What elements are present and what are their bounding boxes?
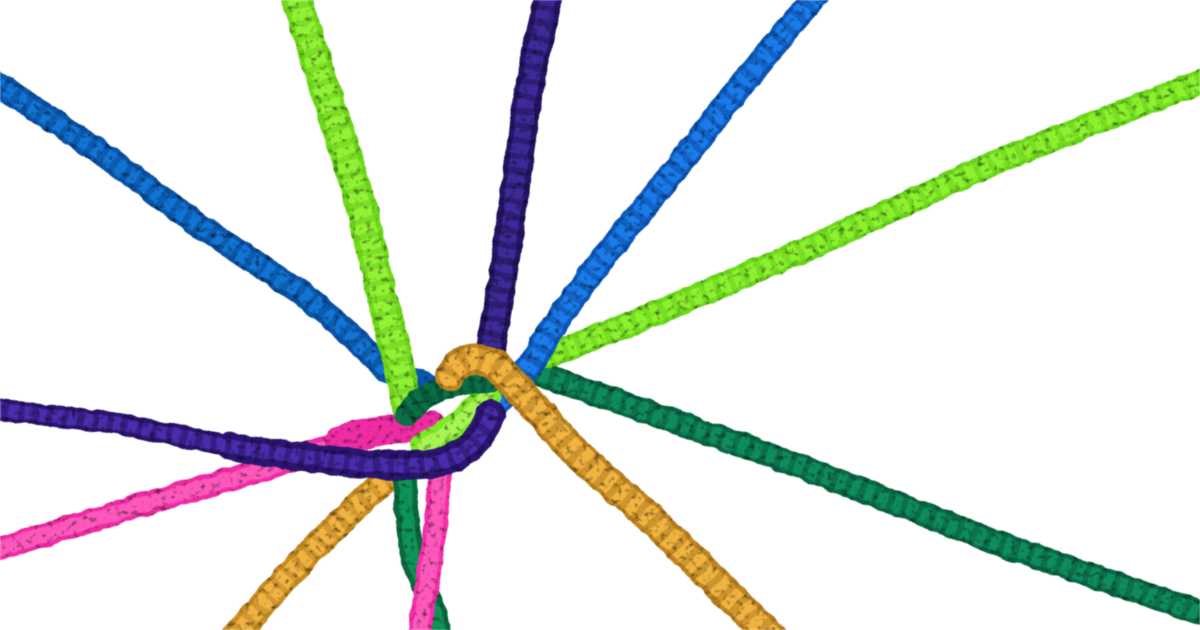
rope: purple wrapping the knot and running left [0,408,491,465]
rope: blue to the upper left [0,78,432,388]
knot: dark green centre strand [407,380,492,414]
rope: navy going up [490,0,550,352]
rope: blue to the upper right [492,0,822,408]
knot: lime centre strand [424,394,488,446]
rope: gold over the knot and running to the lower right [450,359,775,630]
rope: lime going up [294,0,407,408]
rope: gold to the lower left [232,478,388,630]
rope: pink to the left [0,426,436,552]
rope: dark green going down [405,476,441,630]
rope: pink going down [418,468,441,630]
rope: dark green to the right [535,372,1200,618]
rope: lime to the right [548,76,1200,356]
